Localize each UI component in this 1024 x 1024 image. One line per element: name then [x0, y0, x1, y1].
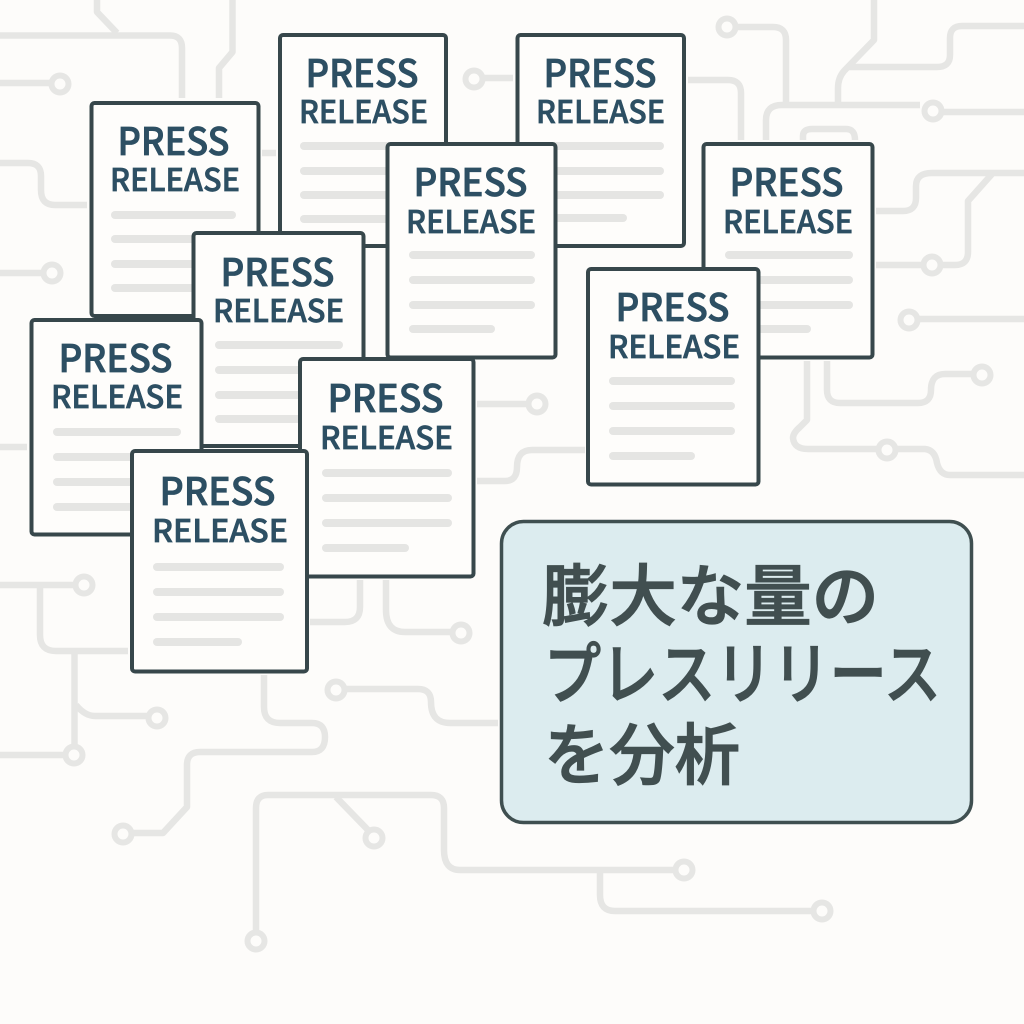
document B: PRESS — [306, 43, 418, 98]
callout: analysis caption — [502, 522, 972, 822]
document D: PRESS — [414, 152, 528, 207]
document F — [194, 233, 364, 446]
document G: RELEASE — [608, 322, 740, 367]
callout: analysis caption: 膨大な量の — [542, 560, 879, 635]
document E: RELEASE — [723, 197, 853, 242]
callout: analysis caption: プレスリリース — [544, 638, 941, 713]
document G: PRESS — [616, 277, 730, 332]
document A: RELEASE — [110, 155, 240, 200]
document I: RELEASE — [320, 413, 453, 458]
document E: PRESS — [730, 152, 844, 207]
document G — [588, 269, 758, 484]
document A — [92, 103, 258, 316]
document C: RELEASE — [536, 87, 665, 132]
document D — [388, 144, 556, 358]
document B: RELEASE — [299, 87, 428, 132]
document F: RELEASE — [213, 286, 344, 331]
document C — [518, 35, 684, 246]
document D: RELEASE — [406, 197, 536, 242]
document E — [704, 144, 872, 358]
document H: PRESS — [58, 328, 172, 383]
document H — [32, 320, 202, 534]
document I: PRESS — [328, 368, 444, 423]
document J: RELEASE — [152, 506, 288, 551]
document I — [300, 359, 474, 576]
document H: RELEASE — [51, 372, 183, 417]
document C: PRESS — [544, 43, 656, 98]
document B — [280, 35, 446, 246]
document A: PRESS — [118, 111, 230, 166]
document J: PRESS — [160, 461, 276, 516]
callout: analysis caption: を分析 — [544, 719, 740, 794]
document J — [132, 451, 307, 672]
document F: PRESS — [220, 242, 334, 297]
